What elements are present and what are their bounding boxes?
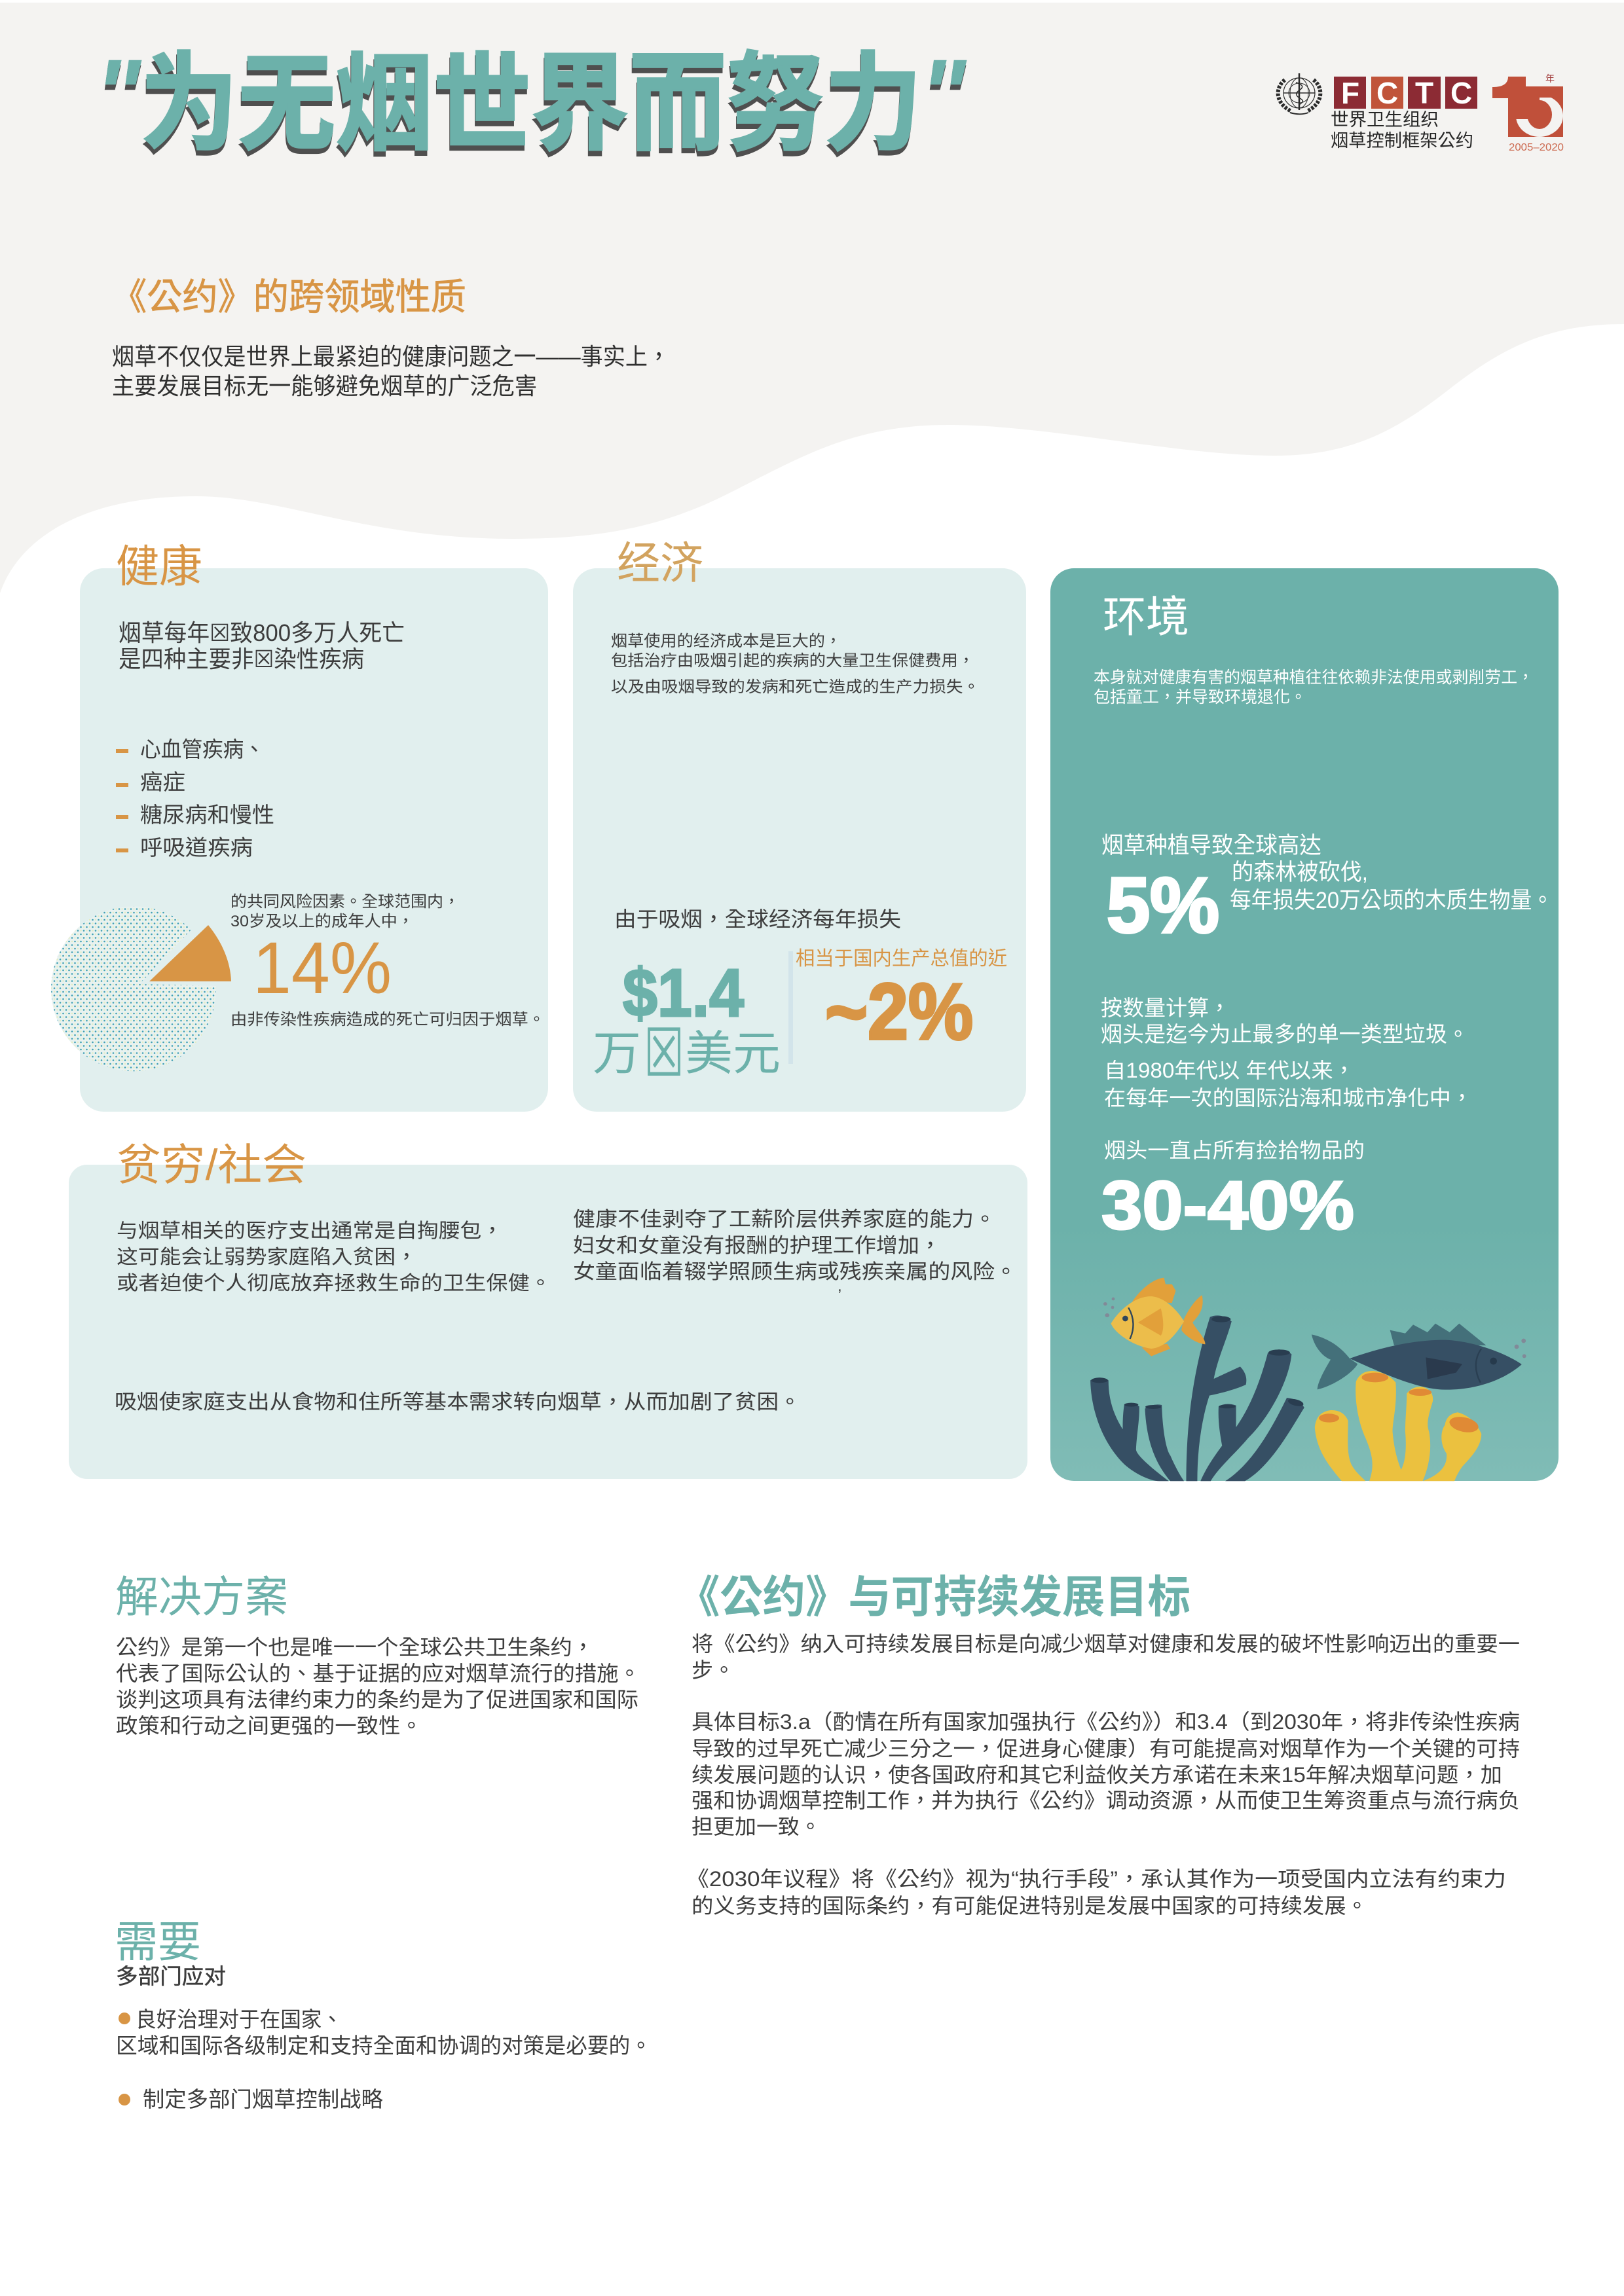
poverty text left: 或者迫使个人彻底放弃拯救生命的卫生保健。 [117,1273,551,1294]
icon: WHO emblem [1278,73,1320,114]
litter text: 在每年一次的国际沿海和城市净化中， [1104,1086,1473,1110]
disease list [116,737,274,860]
global loss text: 由于吸烟，全球经济每年损失 [614,907,901,931]
heading: needs: 需要 [115,1918,201,1966]
economy text [611,632,980,696]
FCTC letter boxes: C [1450,76,1472,110]
illustration: fish and coral [1090,1278,1526,1481]
SDG paragraph three [686,1867,1506,1918]
logo: WHO FCTC 15 years [1278,73,1564,153]
intro text: 主要发展目标无一能够避免烟草的广泛危害 [112,373,537,399]
title: " [95,39,142,149]
yellow coral [1315,1371,1482,1481]
litter text: 烟头是迄今为止最多的单一类型垃圾。 [1101,1022,1469,1046]
panel: health [51,542,548,1112]
environment intro: 本身就对健康有害的烟草种植往往依赖非法使用或剥削劳工， [1094,668,1534,687]
SDG paragraph three: 《2030年议程》将《公约》视为“执行手段”，承认其作为一项受国内立法有约束力 [686,1867,1506,1891]
risk factor text: 的共同风险因素。全球范围内， [231,893,460,911]
logo year: 年 [1545,73,1555,84]
poverty text right: , [838,1277,842,1295]
gdp caption: 相当于国内生产总值的近 [796,948,1007,970]
health intro text: 是四种主要非☒染性疾病 [119,646,364,672]
SDG paragraph two: 导致的过早死亡减少三分之一，促进身心健康）有可能提高对烟草作为一个关键的可持 [692,1737,1520,1760]
panel: environment [1050,568,1559,1481]
economy text: 包括治疗由吸烟引起的疾病的大量卫生保健费用， [611,652,974,670]
disease list: 呼吸道疾病 [140,835,253,860]
solution text [116,1635,640,1738]
FCTC letter boxes: F [1341,76,1359,110]
SDG paragraph two: 强和协调烟草控制工作，并为执行《公约》调动资源，从而使卫生筹资重点与流行病负 [692,1789,1520,1812]
stat: 14 percent: 14% [253,927,392,1009]
litter text [1101,996,1473,1162]
environment card [1050,568,1559,1481]
disease list: 糖尿病和慢性 [140,803,274,827]
heading: health: 健康 [116,542,202,592]
bullet one: 区域和国际各级制定和支持全面和协调的对策是必要的。 [116,2033,652,2058]
poverty text right [573,1208,1017,1295]
SDG paragraph one: 步。 [692,1658,735,1682]
FCTC letter boxes: T [1415,76,1433,110]
poverty text right: 健康不佳剥夺了工薪阶层供养家庭的能力。 [573,1208,996,1231]
heading: cross-sectoral nature: 《公约》的跨领域性质 [111,276,466,318]
logo text: 烟草控制框架公约 [1331,131,1473,151]
litter text: 烟头一直占所有捡拾物品的 [1104,1139,1365,1162]
stat: 1.4 trillion: $1.4 [623,955,744,1030]
environment intro: 包括童工，并导致环境退化。 [1094,688,1306,706]
section: needs [115,1918,652,2111]
poverty text left [117,1220,551,1294]
health intro text [119,619,405,672]
heading: solution: 解决方案 [115,1573,288,1621]
economy card [573,568,1026,1112]
litter text: 按数量计算， [1101,996,1230,1020]
stat unit: 美元 [685,1028,781,1080]
stat: 5 percent: 5% [1107,862,1219,949]
bullet one: 良好治理对于在国家、 [136,2007,342,2032]
bullet two: 制定多部门烟草控制战略 [143,2087,383,2111]
deforestation text: 的森林被砍伐, [1232,860,1368,885]
stat unit: 万 [593,1028,641,1080]
poverty text right: 女童面临着辍学照顾生病或残疾亲属的风险。 [573,1260,1017,1283]
logo text [1331,110,1473,151]
poverty text bottom: 吸烟使家庭支出从食物和住所等基本需求转向烟草，从而加剧了贫困。 [115,1391,801,1413]
litter text: 自1980年代以 年代以来， [1104,1059,1355,1082]
divider [788,951,793,1064]
economy text: 烟草使用的经济成本是巨大的， [611,632,841,650]
section: solution [115,1573,640,1738]
SDG paragraph one: 将《公约》纳入可持续发展目标是向减少烟草对健康和发展的破坏性影响迈出的重要一 [692,1632,1520,1656]
FCTC letter boxes [1334,76,1477,110]
heading: convention and SDGs: 《公约》与可持续发展目标 [677,1573,1190,1622]
stat: 30-40 percent: 30-40% [1101,1167,1354,1244]
intro text: 烟草不仅仅是世界上最紧迫的健康问题之一——事实上， [112,343,670,370]
section: convention and SDGs [677,1573,1520,1918]
SDG paragraph two: 具体目标3.a（酌情在所有国家加强执行《公约》）和3.4（到2030年，将非传染性疾病 [692,1710,1520,1734]
solution text: 谈判这项具有法律约束力的条约是为了促进国家和国际 [116,1688,638,1711]
subheading: multisectoral response: 多部门应对 [116,1964,226,1988]
SDG paragraph two [692,1710,1520,1838]
deforestation text [1101,833,1553,913]
risk factor text: 30岁及以上的成年人中， [231,913,414,930]
title: " [94,44,141,154]
SDG paragraph two: 担更加一致。 [692,1815,821,1838]
solution text: 代表了国际公认的、基于证据的应对烟草流行的措施。 [116,1662,640,1685]
health intro text: 烟草每年☒致800多万人死亡 [119,619,405,646]
pie chart 14 percent [51,906,231,1071]
heading: poverty: 贫穷/社会 [117,1140,306,1189]
health card [80,568,548,1112]
stat: 2 percent: ~2% [825,967,973,1056]
title: 为无烟世界而努力 [140,44,922,164]
panel: economy [573,539,1026,1112]
intro text [112,343,670,399]
stat unit: ☒ [644,1017,684,1090]
title: " [920,39,967,149]
blue fish [1312,1324,1526,1390]
panel: poverty and society [69,1140,1027,1479]
risk factor text [231,893,460,930]
disease list: 癌症 [140,770,185,794]
SDG paragraph two: 续发展问题的认识，使各国政府和其它利益攸关方承诺在未来15年解决烟草问题，加 [692,1763,1502,1787]
solution text: 政策和行动之间更强的一致性。 [116,1714,422,1738]
yellow fish [1103,1278,1206,1357]
stat caption: 由非传染性疾病造成的死亡可归因于烟草。 [231,1011,545,1029]
environment intro [1094,668,1534,706]
poverty text right: 妇女和女童没有报酬的护理工作增加， [573,1234,941,1257]
deforestation text: 烟草种植导致全球高达 [1101,833,1321,858]
FCTC letter boxes: C [1376,76,1398,110]
grey header background [0,3,1624,593]
solution text: 公约》是第一个也是唯一一个全球公共卫生条约， [116,1635,594,1659]
poverty text left: 与烟草相关的医疗支出通常是自掏腰包， [117,1220,503,1242]
icon: number 15 [1492,77,1563,137]
poverty card [69,1165,1027,1479]
deforestation text: 每年损失20万公顷的木质生物量。 [1230,888,1553,913]
stat unit [593,1017,781,1090]
logo dates: 2005–2020 [1509,142,1564,153]
bullet one [116,2007,652,2058]
economy text: 以及由吸烟导致的发病和死亡造成的生产力损失。 [611,678,980,696]
title: 为无烟世界而努力 [139,49,921,169]
heading: environment: 环境 [1103,592,1189,641]
SDG paragraph three: 的义务支持的国际条约，有可能促进特别是发展中国家的可持续发展。 [692,1894,1368,1918]
logo text: 世界卫生组织 [1331,110,1439,130]
heading: economy: 经济 [617,539,703,589]
title: " [919,44,967,154]
disease list: 心血管疾病、 [140,737,265,761]
navy coral [1090,1315,1305,1481]
poverty text left: 这可能会让弱势家庭陷入贫困， [117,1247,417,1268]
SDG paragraph one [692,1632,1520,1682]
